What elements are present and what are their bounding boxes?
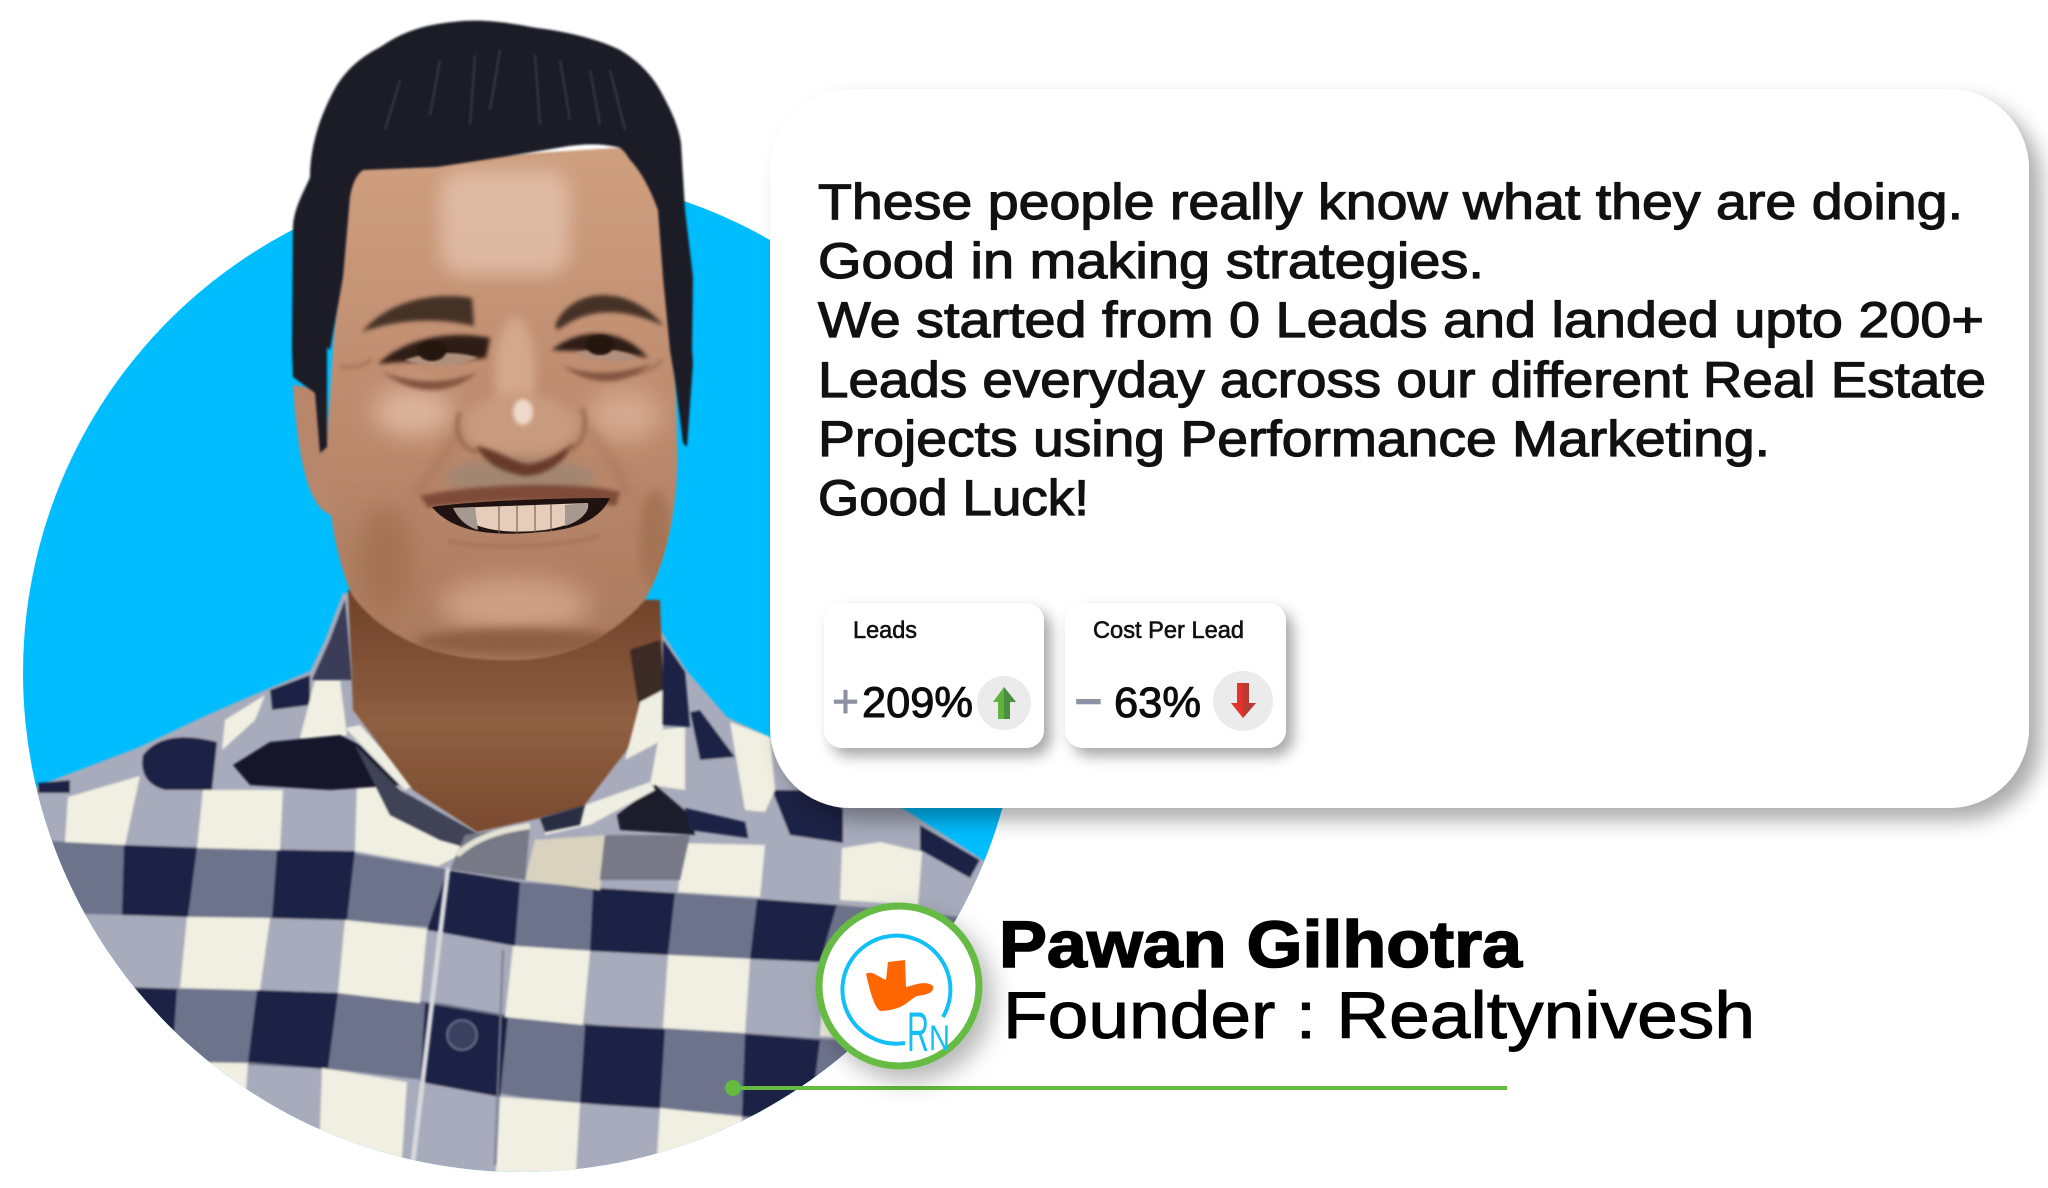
stat card: leads: 209%	[862, 679, 973, 727]
icon: red down arrow	[1231, 683, 1256, 718]
testimonial quote text: Leads everyday across our different Real Estate	[818, 352, 1986, 408]
smile	[420, 485, 620, 546]
face	[327, 145, 677, 660]
eyes	[378, 334, 652, 390]
logo letters: R	[907, 1000, 929, 1063]
hair strands	[385, 50, 625, 130]
stat card: leads: Leads	[853, 617, 917, 644]
stat card: cost per lead: −	[1075, 675, 1102, 727]
nose	[457, 408, 585, 476]
collar inner right	[540, 640, 690, 832]
testimonial quote text: Good in making strategies.	[818, 233, 1484, 289]
checked shirt	[36, 592, 984, 1172]
logo orange hand	[866, 960, 933, 1011]
panel background	[770, 89, 2029, 808]
founder name: Pawan Gilhotra	[999, 907, 1523, 981]
portrait: blue circle with founder photo illustration	[0, 21, 1040, 1188]
stat card: cost per lead	[1065, 603, 1286, 748]
stat card: cost per lead: 63%	[1114, 679, 1201, 727]
panel: testimonial card	[770, 89, 2029, 808]
founder role: Founder : Realtynivesh	[1003, 978, 1755, 1052]
logo blue ring	[842, 936, 950, 1044]
green divider line with dot	[725, 1080, 1507, 1096]
testimonial quote text: These people really know what they are doing.	[818, 174, 1963, 230]
neck	[348, 590, 663, 832]
icon: green up arrow	[993, 687, 1016, 719]
testimonial quote text: Projects using Performance Marketing.	[818, 411, 1770, 467]
testimonial quote text	[818, 174, 1986, 526]
stat card: leads: +	[832, 675, 859, 727]
eyebrows	[362, 295, 664, 332]
facial shading	[340, 170, 671, 656]
blue circle background	[23, 174, 1021, 1172]
testimonial quote text: Good Luck!	[818, 470, 1089, 526]
hair	[292, 21, 693, 453]
testimonial quote text: We started from 0 Leads and landed upto 200+	[818, 292, 1984, 348]
logo letters: N	[929, 1019, 950, 1058]
logo circle	[819, 906, 979, 1066]
logo badge: Realtynivesh	[819, 906, 979, 1066]
stat card: leads	[824, 603, 1044, 748]
shirt collar and placket	[233, 600, 748, 1170]
ear	[293, 385, 335, 515]
stat card: cost per lead: Cost Per Lead	[1093, 617, 1244, 644]
